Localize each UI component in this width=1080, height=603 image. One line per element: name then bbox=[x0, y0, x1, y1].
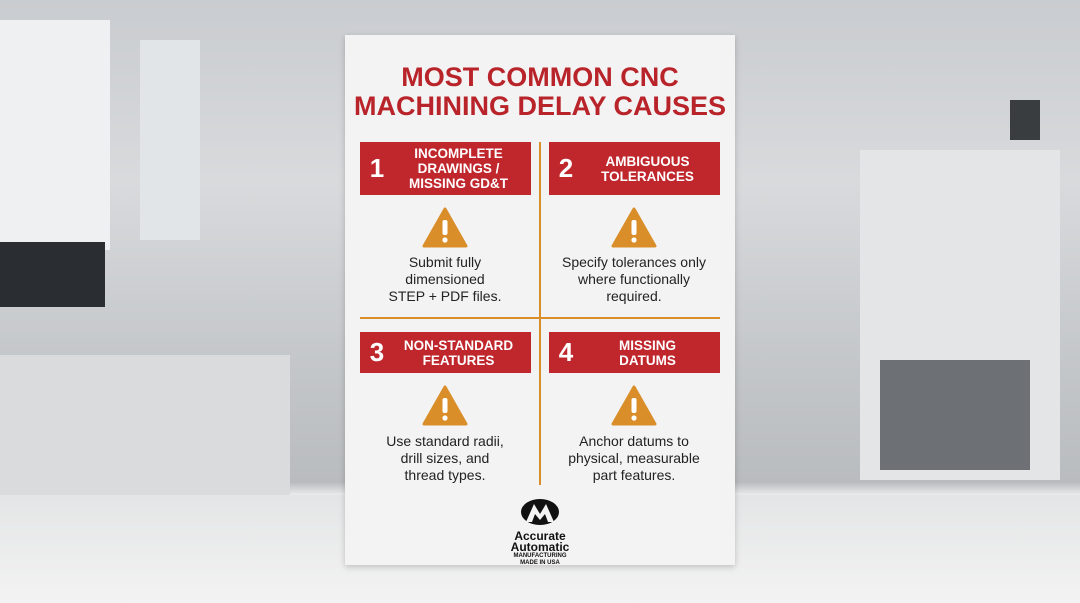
text 3: Use standard radii, bbox=[386, 433, 504, 449]
cause 2: 2 bbox=[559, 153, 573, 183]
cause 1 bbox=[360, 142, 531, 195]
text 3: drill sizes, and bbox=[401, 450, 489, 466]
cause 3: NON-STANDARD bbox=[404, 338, 513, 352]
text 2 bbox=[562, 254, 706, 304]
cause 2: AMBIGUOUS bbox=[606, 154, 690, 168]
icon: warning 4 bbox=[612, 385, 657, 426]
text 2: where functionally bbox=[578, 271, 690, 287]
poster card bbox=[345, 35, 735, 565]
cause 2 bbox=[549, 142, 720, 195]
logo: Accurate bbox=[514, 529, 566, 543]
icon: warning 1 bbox=[422, 207, 468, 248]
cause 4 bbox=[549, 332, 720, 373]
cause 1: MISSING GD&T bbox=[409, 176, 508, 191]
logo: MADE IN USA bbox=[520, 560, 560, 566]
cause 4: DATUMS bbox=[619, 352, 676, 368]
icon: warning 3 bbox=[422, 385, 468, 426]
text 4: physical, measurable bbox=[568, 450, 700, 466]
icon: warning 2 bbox=[612, 207, 657, 248]
cause 1: DRAWINGS / bbox=[418, 161, 499, 176]
cause 3 bbox=[360, 332, 531, 373]
logo: MANUFACTURING bbox=[514, 553, 566, 559]
cause 1: INCOMPLETE bbox=[414, 146, 503, 161]
dividers bbox=[539, 142, 541, 485]
text 4 bbox=[568, 433, 700, 483]
cause 4: 4 bbox=[559, 337, 573, 367]
title: MACHINING DELAY CAUSES bbox=[354, 91, 726, 121]
text 1: Submit fully bbox=[409, 254, 481, 270]
text 1: dimensioned bbox=[405, 271, 485, 287]
cause 3: FEATURES bbox=[423, 352, 494, 368]
text 4: part features. bbox=[593, 467, 675, 483]
title: MOST COMMON CNC bbox=[401, 62, 679, 92]
text 3: thread types. bbox=[405, 467, 485, 483]
logo bbox=[511, 499, 569, 566]
text 1 bbox=[389, 254, 501, 304]
text 2: required. bbox=[606, 288, 662, 304]
text 4: Anchor datums to bbox=[579, 433, 689, 449]
cause 2: TOLERANCES bbox=[601, 168, 694, 184]
cause 4: MISSING bbox=[619, 338, 676, 352]
cause 3: 3 bbox=[370, 337, 384, 367]
logo: Automatic bbox=[511, 540, 569, 554]
title bbox=[354, 62, 726, 121]
text 2: Specify tolerances only bbox=[562, 254, 706, 270]
text 3 bbox=[386, 433, 504, 483]
text 1: STEP + PDF files. bbox=[389, 288, 501, 304]
cause 1: 1 bbox=[370, 153, 384, 183]
